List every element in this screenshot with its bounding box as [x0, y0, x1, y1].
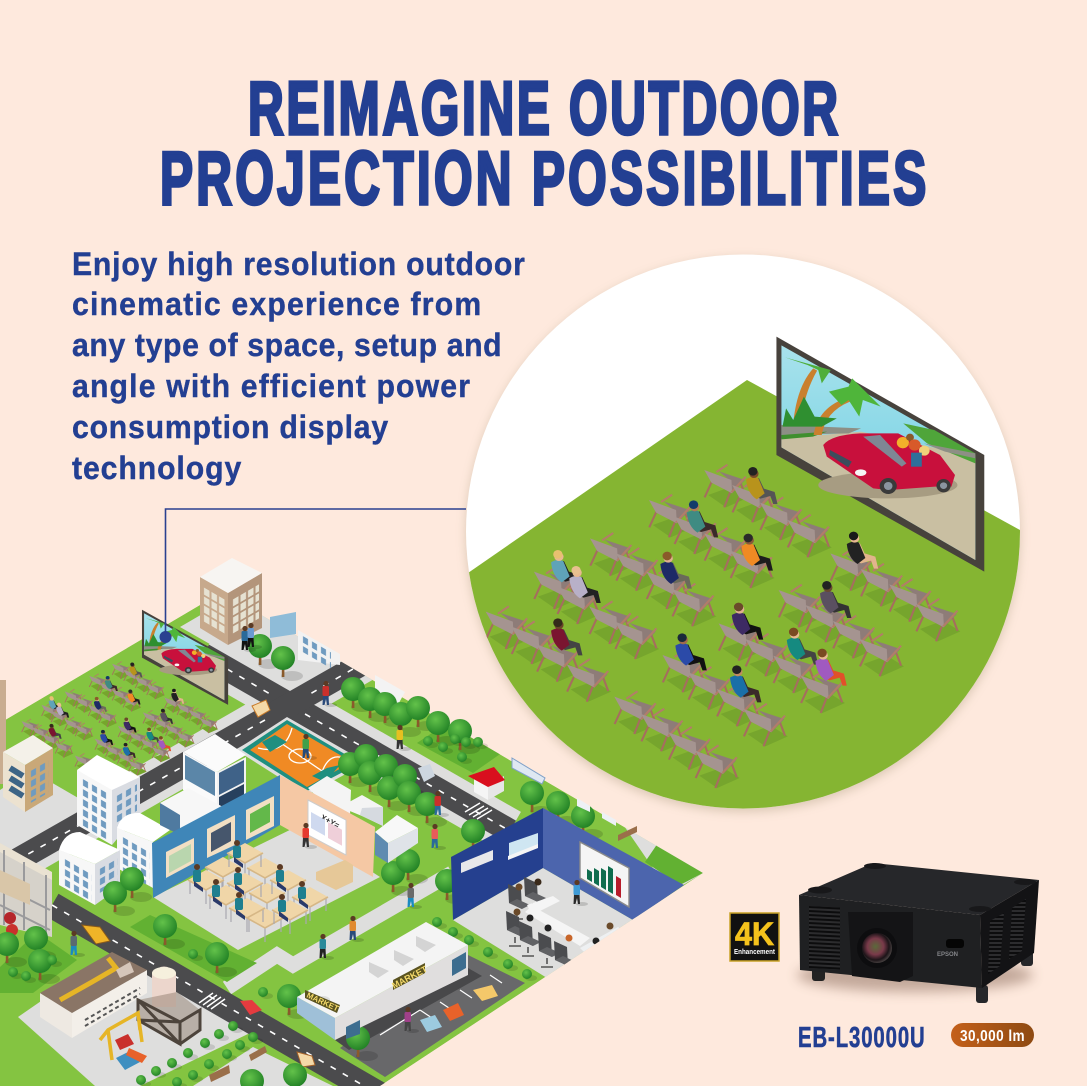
- parking lot: [335, 955, 525, 1077]
- low buildings beside school: [308, 776, 418, 863]
- market: [297, 922, 468, 1040]
- roads: [0, 655, 510, 1086]
- 4K badge: 4K: [735, 916, 774, 952]
- water tower: [138, 966, 200, 1044]
- pedestrians: [70, 623, 449, 1033]
- description text: technology: [72, 450, 242, 486]
- brightness pill: 30,000 lm: [960, 1028, 1025, 1045]
- gantry crane and trucks: [100, 1013, 147, 1070]
- small buildings behind tower: [270, 612, 405, 710]
- 4K badge: Enhancement: [734, 949, 776, 956]
- description text: consumption display: [72, 409, 389, 445]
- 4K badge: [730, 913, 779, 961]
- tan apartment building: [0, 680, 53, 812]
- description text: any type of space, setup and: [72, 327, 502, 363]
- brown tower: [200, 558, 262, 645]
- glass office building: [160, 734, 246, 835]
- classroom: [152, 775, 375, 942]
- dark lawn patches: [0, 723, 703, 993]
- small cinema field copy: [22, 610, 228, 793]
- model name: EB-L30000U: [798, 1022, 925, 1054]
- whiteboard: [308, 800, 346, 855]
- basketball court: [242, 717, 344, 792]
- description text: cinematic experience from: [72, 286, 481, 322]
- sidewalks: [0, 655, 510, 870]
- market: MARKET: [305, 991, 340, 1013]
- presentation board: [580, 842, 629, 907]
- warehouse: [0, 843, 52, 937]
- white towers: [59, 755, 170, 905]
- description text: angle with efficient power: [72, 368, 470, 404]
- brightness pill: [951, 1023, 1034, 1047]
- house: [468, 767, 505, 800]
- description text: Enjoy high resolution outdoor: [72, 246, 525, 282]
- city ground, pads and roads: [0, 592, 703, 1086]
- street furniture and vehicles: [82, 700, 637, 1082]
- city buildings, trees and people: [0, 558, 684, 1086]
- connector line and dot: [160, 509, 466, 643]
- ground: [0, 592, 703, 1086]
- lower district trees: [0, 867, 537, 1086]
- desks: [188, 840, 328, 942]
- crosswalks: [199, 803, 492, 1009]
- title: REIMAGINE OUTDOOR: [248, 67, 838, 151]
- description text: [72, 246, 525, 486]
- trees upper district: [248, 634, 603, 904]
- meeting room: [451, 808, 684, 978]
- projector: [730, 863, 1039, 1003]
- title: PROJECTION POSSIBILITIES: [160, 137, 926, 221]
- circle callout: outdoor cinema: [462, 254, 1024, 816]
- factory: [40, 952, 147, 1038]
- grey pads and walkways: [0, 592, 703, 1086]
- projector: EPSON: [937, 952, 958, 958]
- whiteboard: X+Y=: [319, 813, 341, 830]
- meeting tables and attendees: [506, 877, 620, 968]
- title: [160, 67, 926, 221]
- market: MARKET: [390, 964, 429, 991]
